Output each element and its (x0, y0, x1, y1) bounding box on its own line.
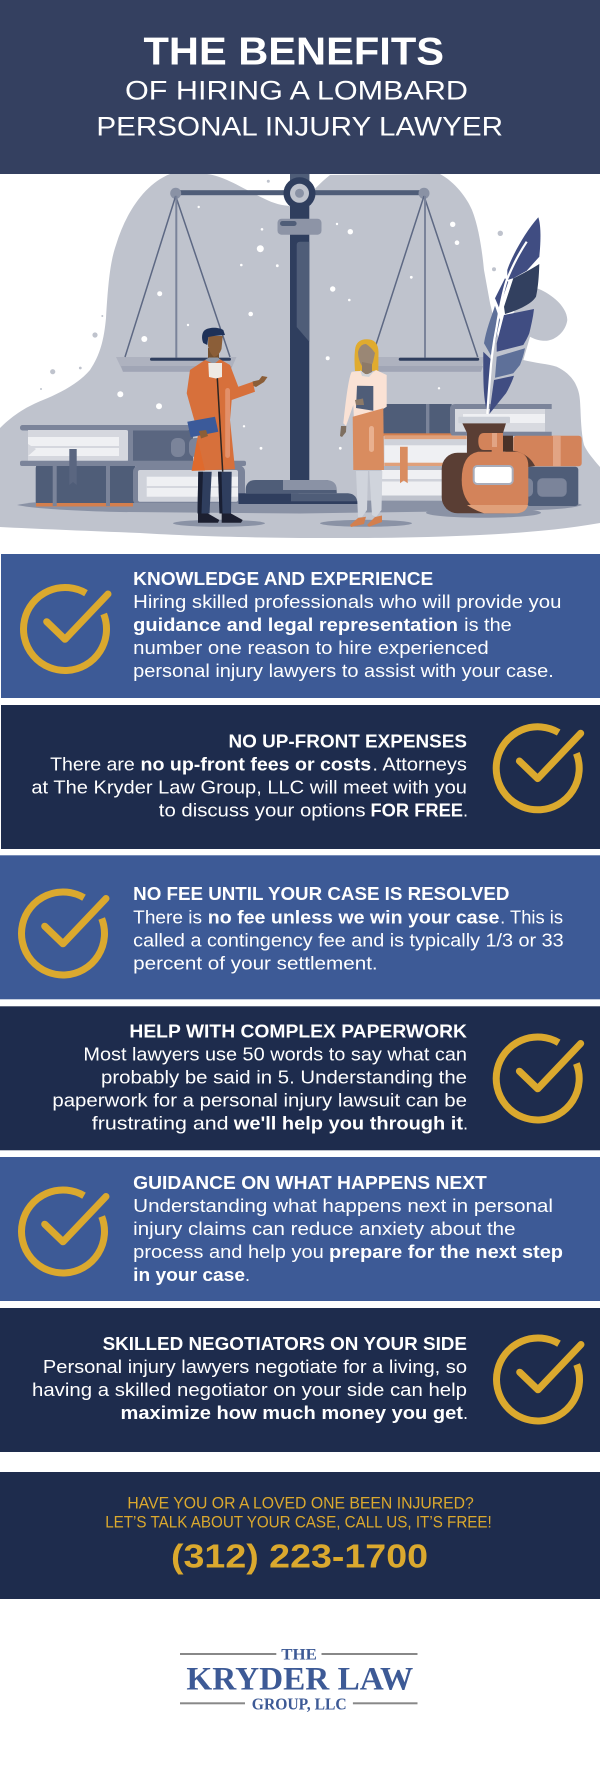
text block (32, 1334, 468, 1423)
panel: skilled negotiators on your side (0, 1308, 600, 1452)
call to action text: LET’S TALK ABOUT YOUR CASE, CALL US, IT’S FREE! (105, 1514, 492, 1532)
text block: no fee unless we win your case (208, 907, 499, 927)
phone number: (312) 223-1700 (171, 1537, 428, 1574)
text block: . (463, 1113, 468, 1133)
text block: frustrating and (92, 1113, 228, 1133)
icon: check circle (22, 892, 106, 975)
panel: no up-front expenses (1, 705, 600, 849)
text block: guidance and legal representation (133, 615, 458, 635)
text block: There are (50, 754, 135, 774)
feather quill (483, 217, 540, 414)
text block: process and help you (133, 1242, 324, 1262)
text block: Most lawyers use 50 words to say what can (83, 1044, 467, 1064)
text block: . (245, 1265, 250, 1285)
panel: call to action (0, 1472, 600, 1599)
text block: probably be said in 5. Understanding the (101, 1067, 467, 1087)
icon: check circle (496, 1037, 581, 1120)
text block: no up-front fees or costs (140, 754, 371, 774)
text block: called a contingency fee and is typically 1/3 or 33 (133, 930, 564, 950)
text block: SKILLED NEGOTIATORS ON YOUR SIDE (103, 1334, 467, 1354)
text block: we'll help you through it (233, 1113, 463, 1133)
text block (133, 884, 564, 973)
icon: check circle (22, 1190, 106, 1273)
text block: Personal injury lawyers negotiate for a living, so (43, 1357, 467, 1377)
logo: the kryder law group (180, 1647, 418, 1713)
text block (133, 569, 561, 681)
logo: the kryder law group: KRYDER LAW (186, 1661, 413, 1697)
text block: personal injury lawyers to assist with your case. (133, 661, 554, 681)
text block: NO FEE UNTIL YOUR CASE IS RESOLVED (133, 884, 509, 904)
icon: check circle (496, 727, 581, 810)
inkwell (426, 417, 541, 518)
panel: knowledge and experience (1, 554, 600, 698)
subheading (96, 75, 503, 142)
text block: Understanding what happens next in personal (133, 1196, 553, 1216)
icon: check circle (24, 587, 108, 670)
background blob (0, 174, 600, 538)
heading: the benefits: THE BENEFITS (144, 30, 444, 73)
text block: . Attorneys (372, 754, 467, 774)
panel: guidance on what happens next (0, 1157, 600, 1301)
text block: KNOWLEDGE AND EXPERIENCE (133, 569, 433, 589)
icon: check circle (497, 1338, 581, 1421)
text block: GUIDANCE ON WHAT HAPPENS NEXT (133, 1173, 487, 1193)
stars (117, 206, 459, 450)
left book stack (20, 425, 246, 506)
right pan strings and bowl (364, 357, 484, 372)
scale clamp (278, 219, 322, 235)
text block: percent of your settlement. (133, 953, 378, 973)
left pan strings and bowl (116, 357, 236, 372)
title banner (0, 0, 600, 174)
woman in orange skirt (320, 339, 412, 527)
text block: HELP WITH COMPLEX PAPERWORK (129, 1021, 467, 1041)
ground shadow (17, 500, 582, 514)
scale pillar (290, 174, 309, 482)
logo: the kryder law group: THE (281, 1647, 317, 1664)
text block: paperwork for a personal injury lawsuit can be (52, 1090, 467, 1110)
text block: having a skilled negotiator on your side can help (32, 1380, 467, 1400)
text block: FOR FREE (370, 800, 463, 820)
text block: at The Kryder Law Group, LLC will meet with you (31, 777, 467, 797)
scale beam (176, 190, 424, 195)
text block: injury claims can reduce anxiety about the (133, 1219, 515, 1239)
panel: no fee until your case is resolved (0, 855, 600, 999)
text block: prepare for the next step (329, 1242, 563, 1262)
text block: is the (464, 615, 512, 635)
right book stack (382, 404, 582, 506)
text block: in your case (133, 1265, 245, 1285)
panel: help with complex paperwork (0, 1006, 600, 1150)
text block: Hiring skilled professionals who will provide you (133, 592, 561, 612)
text block: number one reason to hire experienced (133, 638, 489, 658)
scale base (238, 480, 358, 504)
man in orange coat (173, 328, 268, 527)
subheading: OF HIRING A LOMBARD (125, 75, 468, 105)
text block (31, 731, 468, 820)
text block: . (463, 1403, 468, 1423)
text block (52, 1021, 468, 1133)
call to action text (105, 1495, 492, 1532)
text block: maximize how much money you get (120, 1403, 463, 1423)
text block: NO UP-FRONT EXPENSES (228, 731, 467, 751)
text block (133, 1173, 563, 1285)
illustration: scales of justice with lawyers, books and inkwell (0, 174, 600, 538)
text block: to discuss your options (159, 800, 366, 820)
text block: . This is (500, 907, 563, 927)
text block: . (463, 800, 468, 820)
logo: the kryder law group: GROUP, LLC (252, 1694, 347, 1713)
call to action text: HAVE YOU OR A LOVED ONE BEEN INJURED? (127, 1495, 474, 1513)
subheading: PERSONAL INJURY LAWYER (96, 112, 503, 142)
text block: There is (133, 907, 202, 927)
